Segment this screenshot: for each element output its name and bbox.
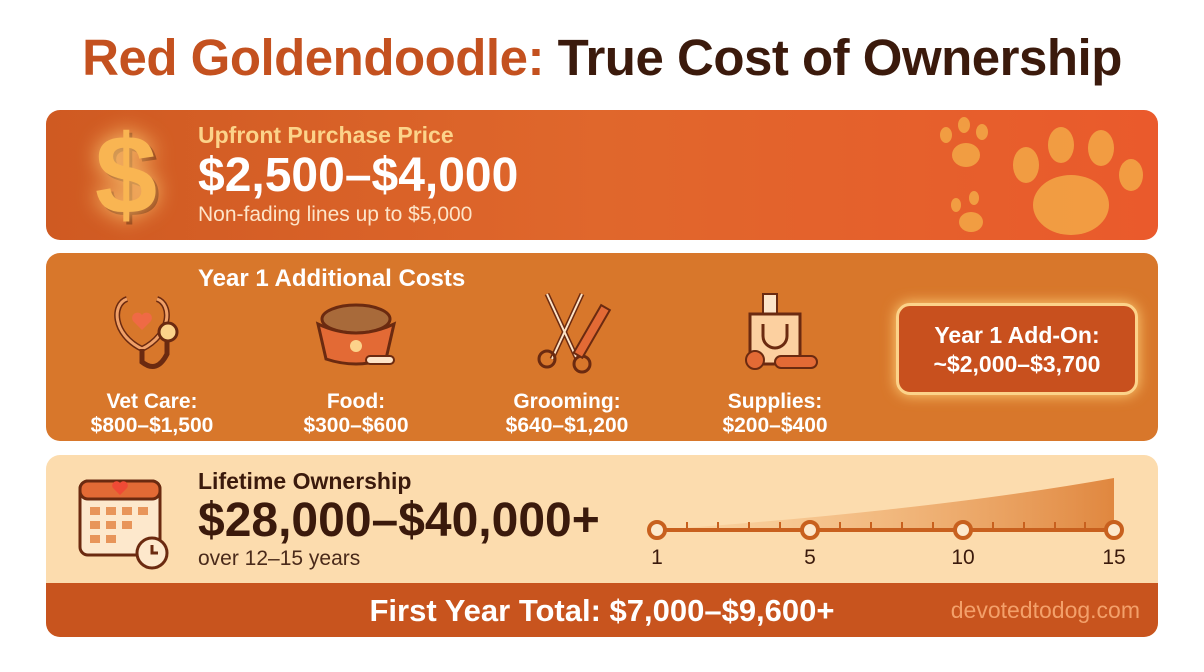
chart: timeline (647, 478, 1126, 569)
item: vet care (90, 296, 213, 437)
callout: year 1 add-on: ~$2,000–$3,700 (934, 351, 1100, 377)
item: food (303, 304, 409, 437)
text: lifetime (198, 468, 600, 570)
text: upfront: Upfront Purchase Price (198, 122, 454, 148)
chart: timeline: 1 (651, 546, 663, 569)
callout: year 1 add-on (896, 303, 1138, 395)
item: grooming: $640–$1,200 (506, 414, 628, 437)
item: grooming (506, 293, 628, 437)
footer band: first year total (46, 583, 1158, 637)
panel: lifetime (46, 455, 1158, 637)
item: supplies (722, 293, 828, 437)
chart: timeline: 5 (804, 546, 816, 569)
item: grooming: Grooming: (513, 390, 621, 413)
text: upfront: Non-fading lines up to $5,000 (198, 203, 472, 226)
item: vet care: Vet Care: (106, 390, 198, 413)
heading: Year 1 Additional Costs (198, 265, 465, 292)
icon: paw prints (940, 117, 1143, 235)
text: lifetime: $28,000–$40,000+ (198, 494, 600, 547)
chart: timeline: 10 (951, 546, 975, 569)
icon: dollar sign: $ (95, 112, 157, 237)
callout: year 1 add-on: Year 1 Add-On: (934, 322, 1100, 348)
title: Red Goldendoodle: True Cost of Ownership (82, 29, 1122, 86)
text: upfront: $2,500–$4,000 (198, 149, 518, 202)
source: devotedtodog.com (951, 597, 1140, 623)
text: upfront (198, 122, 518, 226)
item: vet care: $800–$1,500 (91, 414, 213, 437)
panel: upfront price (46, 110, 1158, 240)
icon: calendar (78, 480, 168, 570)
item: food: $300–$600 (303, 414, 409, 437)
panel: year 1 costs (46, 253, 1158, 441)
item: supplies: $200–$400 (722, 414, 828, 437)
footer band: first year total: First Year Total: $7,000–$9,600+ (369, 593, 834, 628)
text: lifetime: Lifetime Ownership (198, 468, 411, 494)
item: supplies: Supplies: (728, 390, 822, 413)
text: lifetime: over 12–15 years (198, 547, 360, 570)
item: food: Food: (327, 390, 385, 413)
chart: timeline: 15 (1102, 546, 1126, 569)
